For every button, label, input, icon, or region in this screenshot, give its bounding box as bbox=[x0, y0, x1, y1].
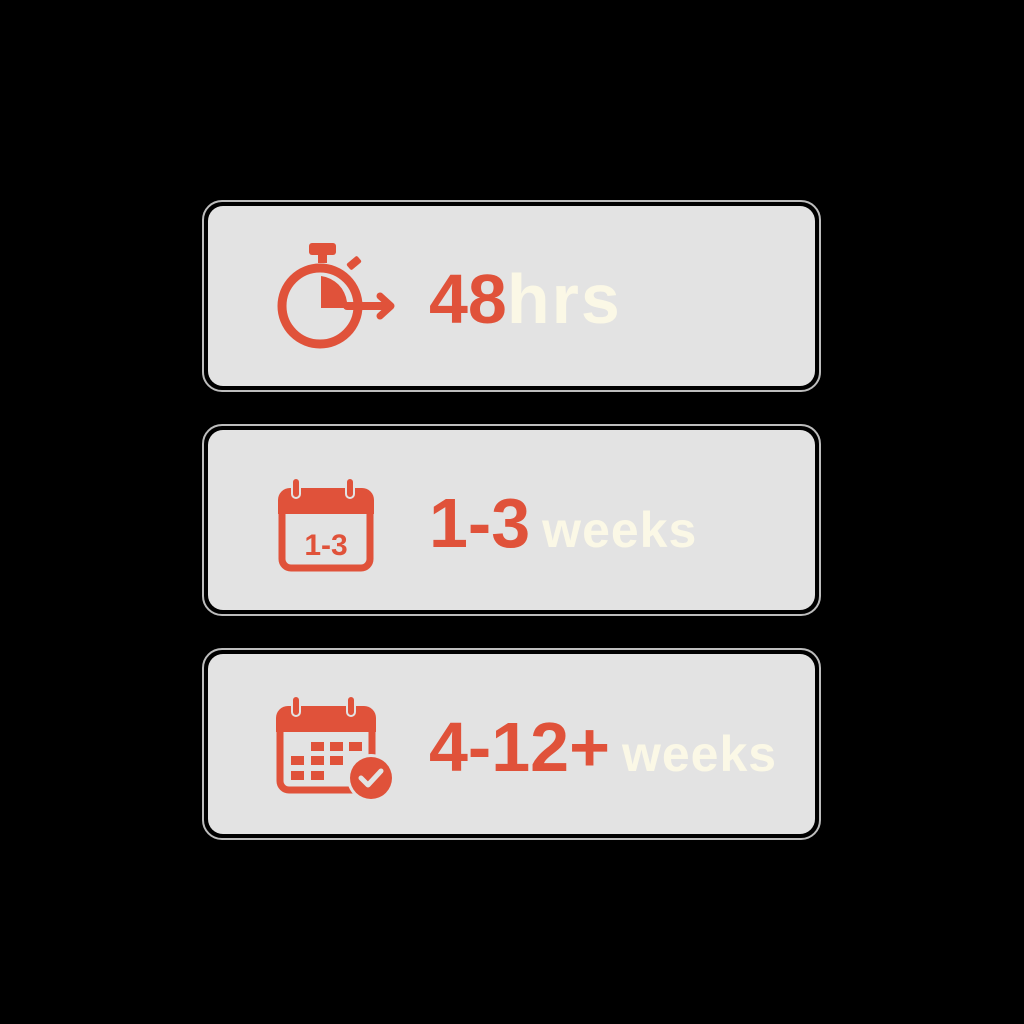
icon: calendar 1-3: 1-3 bbox=[304, 529, 348, 562]
icon: calendar 1-3 bbox=[278, 479, 374, 572]
text: 48hrs: 48hrs bbox=[429, 260, 622, 338]
card: 4-12+ weeks bbox=[202, 648, 821, 840]
text: 4-12+ weeks: 4-12+weeks bbox=[429, 708, 777, 786]
icon: calendar with check bbox=[276, 697, 392, 799]
icon: stopwatch bbox=[278, 243, 394, 348]
card: 48hrs bbox=[202, 200, 821, 392]
text: 1-3 weeks: 1-3weeks bbox=[429, 484, 697, 562]
card: 1-3 weeks bbox=[202, 424, 821, 616]
